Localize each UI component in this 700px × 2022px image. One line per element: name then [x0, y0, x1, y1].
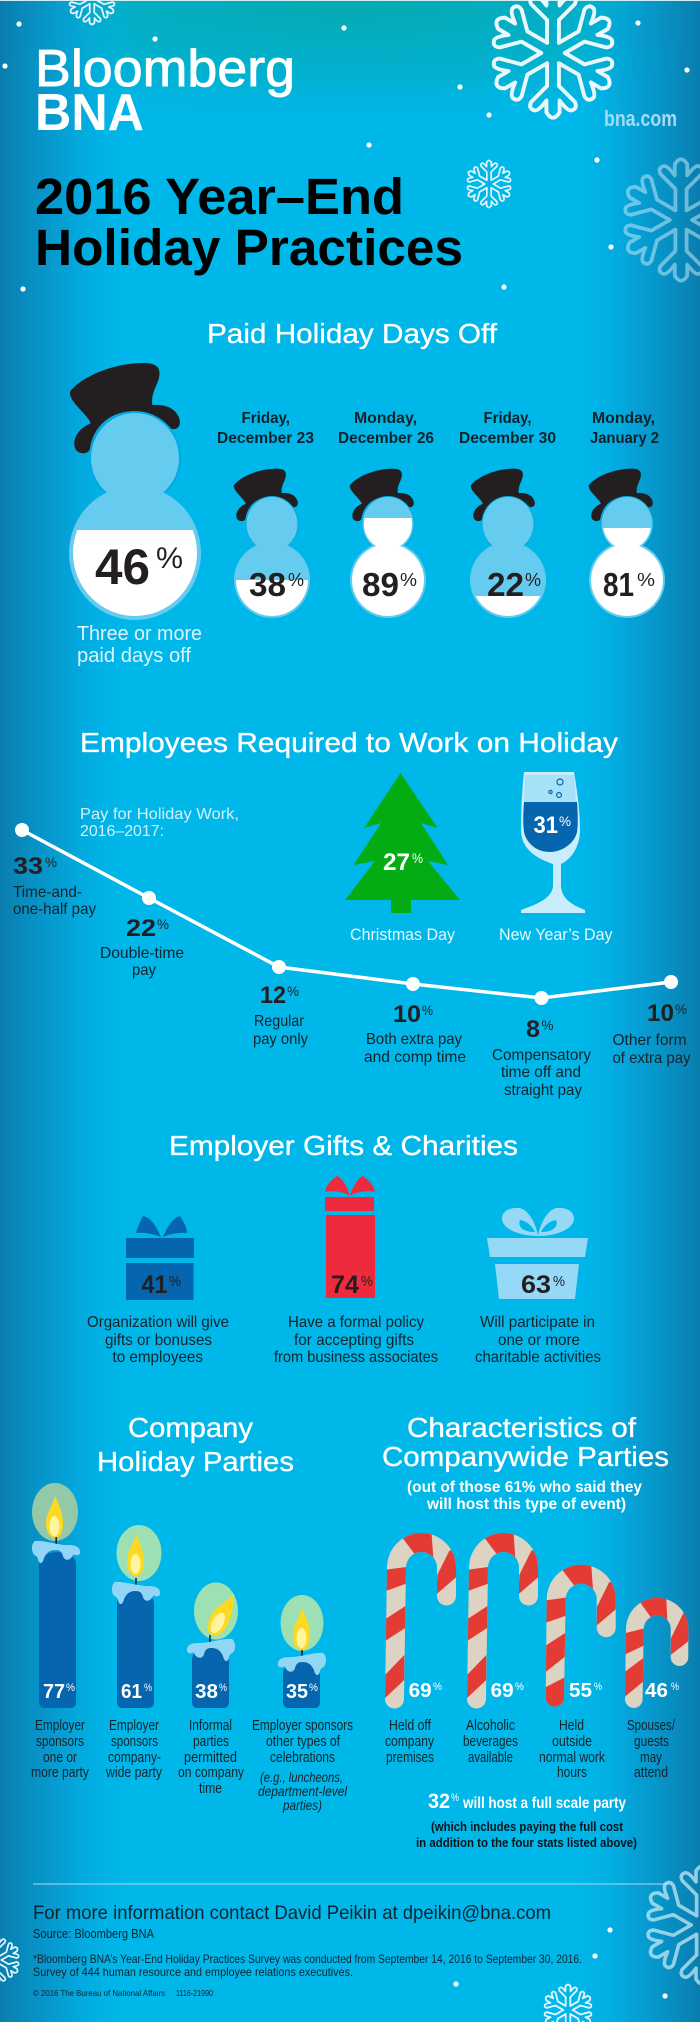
gift: 63% charitable activities: [475, 1208, 601, 1366]
date: January 2: Monday,: [592, 410, 655, 427]
data label: 8%: time off and: [501, 1064, 581, 1081]
heading: Holiday Parties: [97, 1446, 294, 1477]
data label: 10%: Both extra pay: [366, 1031, 462, 1048]
data label: 8%: %: [542, 1017, 554, 1033]
date: December 30: December 30: [459, 430, 556, 447]
data label: other 10%: 10: [647, 1000, 674, 1027]
candy cane: 69% alcoholic beverages: 69: [491, 1680, 514, 1702]
candle: 38% informal parties: parties: [193, 1734, 229, 1750]
candy cane: 46% spouses may attend: [625, 1598, 688, 1777]
date: December 30: %: [525, 570, 541, 590]
data label: 12%: Regular: [254, 1013, 305, 1030]
heading: [382, 1412, 669, 1472]
gift: 74% formal policy: Have a formal policy: [288, 1314, 424, 1331]
gift: 74% formal policy: from business associates: [274, 1349, 438, 1366]
subheading: (out of those 61% who said they: [407, 1479, 642, 1496]
data label: other 10%: %: [675, 1001, 687, 1017]
icon: champagne glass 31%: 31: [534, 812, 558, 839]
candle: 61% company-wide party: company-: [108, 1750, 161, 1766]
candle: 77% one or more party: 77: [43, 1681, 65, 1703]
candle: 61% company-wide party: [105, 1525, 163, 1781]
candy cane: 55% outside normal hours: Held: [559, 1718, 584, 1734]
icon: champagne glass 31%: New Year’s Day: [499, 925, 613, 944]
candle: 38% informal parties: time: [199, 1781, 222, 1797]
candle: 38% informal parties: [178, 1582, 245, 1797]
date: December 26: [338, 410, 434, 618]
panel: paid holiday days off: [69, 318, 665, 667]
data label: 12%: pay only: [253, 1031, 308, 1048]
candle: 38% informal parties: 38: [195, 1681, 218, 1703]
gift: 74% formal policy: [274, 1176, 438, 1366]
panel: characteristics of companywide parties: [375, 1412, 700, 1850]
data label: 33%: Time-and-: [13, 884, 82, 901]
caption: three or more: Three or more: [77, 623, 202, 645]
data label: 8%: [492, 1016, 591, 1099]
candle: 35% other celebrations: celebrations: [270, 1750, 335, 1766]
candy cane: 55% outside normal hours: outside: [552, 1734, 592, 1750]
main title: [35, 168, 463, 276]
candle: 61% company-wide party: sponsors: [111, 1734, 158, 1750]
footer: contact and source: © 2016 The Bureau of National Affairs: [33, 1988, 165, 1998]
subheading: [407, 1479, 642, 1513]
date: January 2: %: [637, 570, 655, 590]
candy cane: 55% outside normal hours: 55: [569, 1680, 592, 1702]
data label: 22%: pay: [132, 962, 156, 979]
data label: 22%: [100, 915, 184, 979]
date: December 23: [217, 410, 314, 618]
snowman: three or more days 46%: [69, 363, 201, 620]
gift: 74% formal policy: for accepting gifts: [294, 1332, 414, 1349]
gift: 41% give gifts: %: [169, 1273, 181, 1290]
candle: 77% one or more party: one or: [43, 1750, 77, 1766]
candy cane: 69% off premises: 69: [409, 1680, 432, 1702]
data label: other 10%: Other form: [612, 1032, 686, 1049]
gift: 63% charitable activities: Will participate in: [480, 1314, 595, 1331]
candle: 35% other celebrations: Employer sponsors: [252, 1718, 353, 1734]
candle: 61% company-wide party: 61: [121, 1681, 142, 1703]
date: December 26: December 26: [338, 430, 434, 447]
date: December 26: Monday,: [354, 410, 417, 427]
logo: Bloomberg BNA: [35, 40, 295, 142]
panel: company holiday parties: [31, 1412, 353, 1813]
snowman: three or more days 46%: 46: [95, 539, 150, 595]
date: December 23: December 23: [217, 430, 314, 447]
date: December 30: [459, 410, 556, 618]
footer: contact and source: Source: Bloomberg BNA: [33, 1927, 155, 1941]
callout: 32% full scale party: (which includes paying the full cost: [431, 1819, 624, 1834]
data label: 22%: 22: [126, 915, 156, 942]
callout: 32% full scale party: [416, 1790, 637, 1850]
candle: 35% other celebrations: 35: [286, 1681, 308, 1703]
data label: 10%: [364, 1001, 466, 1066]
data label: 33%: 33: [13, 853, 43, 880]
website link: bna.com: [604, 106, 677, 131]
data label: 22%: Double-time: [100, 945, 184, 962]
snowman: three or more days 46%: %: [156, 542, 183, 575]
callout: 32% full scale party: 32: [428, 1790, 450, 1813]
candy cane: 69% off premises: premises: [386, 1750, 434, 1766]
candle: 35% other celebrations: parties): [282, 1797, 322, 1813]
logo: Bloomberg BNA: BNA: [35, 84, 144, 142]
candle: 35% other celebrations: other types of: [266, 1734, 341, 1750]
line chart: pay types: [13, 823, 690, 1099]
caption: three or more: paid days off: [77, 645, 191, 667]
candle: 77% one or more party: sponsors: [36, 1734, 84, 1750]
candy cane: 46% spouses may attend: 46: [645, 1680, 668, 1702]
data label: 33%: one-half pay: [13, 901, 96, 918]
data label: 8%: straight pay: [504, 1082, 582, 1099]
gift: 74% formal policy: 74: [331, 1271, 359, 1299]
data label: 33%: %: [45, 854, 57, 870]
icon: christmas tree 27%: [345, 773, 460, 944]
heading: Employees Required to Work on Holiday: [80, 727, 618, 758]
candle: 35% other celebrations: department-level: [258, 1783, 348, 1799]
candle: 38% informal parties: permitted: [184, 1750, 237, 1766]
gift: 41% give gifts: Organization will give: [87, 1314, 229, 1331]
subheading: pay for holiday work: Pay for Holiday Work,: [80, 806, 239, 823]
logo: Bloomberg BNA: Bloomberg: [35, 40, 295, 98]
candy cane: 46% spouses may attend: attend: [634, 1765, 668, 1781]
candy cane: 69% off premises: %: [433, 1681, 442, 1693]
footer: contact and source: [33, 1902, 582, 1998]
data label: 12%: 12: [260, 982, 286, 1009]
candle: 61% company-wide party: wide party: [105, 1765, 163, 1781]
gift: 41% give gifts: 41: [142, 1271, 168, 1299]
gift: 41% give gifts: to employees: [112, 1349, 203, 1366]
data label: 33%: [13, 853, 96, 918]
candle: 35% other celebrations: [252, 1595, 353, 1813]
date: December 26: 89: [362, 566, 399, 603]
candy cane: 69% alcoholic beverages: %: [515, 1681, 524, 1693]
candy cane: 46% spouses may attend: %: [671, 1681, 679, 1693]
candy cane: 55% outside normal hours: %: [594, 1681, 602, 1693]
gift: 63% charitable activities: charitable activities: [475, 1349, 601, 1366]
candle: 77% one or more party: Employer: [35, 1718, 85, 1734]
data label: 8%: 8: [526, 1016, 540, 1043]
subheading: pay for holiday work: 2016–2017:: [80, 823, 164, 840]
gift: 74% formal policy: %: [361, 1273, 373, 1290]
data label: other 10%: of extra pay: [612, 1050, 690, 1067]
candle: 61% company-wide party: %: [144, 1682, 152, 1694]
main title: 2016 Year–End: [35, 168, 404, 225]
subheading: pay for holiday work: [80, 806, 239, 840]
candle: 61% company-wide party: Employer: [109, 1718, 159, 1734]
candy cane: 69% alcoholic beverages: beverages: [463, 1734, 518, 1750]
callout: 32% full scale party: %: [451, 1792, 459, 1804]
candy cane: 55% outside normal hours: normal work: [539, 1750, 606, 1766]
data label: 12%: [253, 982, 308, 1048]
date: January 2: 81: [603, 566, 634, 603]
candy cane: 46% spouses may attend: Spouses/: [627, 1718, 676, 1734]
candle: 77% one or more party: more party: [31, 1765, 90, 1781]
heading: Companywide Parties: [382, 1441, 669, 1472]
data label: 10%: and comp time: [364, 1049, 466, 1066]
gift: 63% charitable activities: 63: [521, 1271, 551, 1299]
candle: 38% informal parties: %: [219, 1682, 227, 1694]
callout: 32% full scale party: will host a full scale party: [462, 1795, 626, 1812]
main title: Holiday Practices: [35, 219, 463, 276]
candle: 38% informal parties: on company: [178, 1765, 245, 1781]
heading: [97, 1412, 294, 1477]
gift: 41% give gifts: [87, 1216, 229, 1366]
date: December 23: 38: [249, 566, 286, 603]
candy cane: 55% outside normal hours: [540, 1564, 616, 1777]
panel: employer gifts and charities: [87, 1130, 601, 1366]
data label: 10%: %: [422, 1002, 433, 1018]
candle: 35% other celebrations: %: [309, 1682, 318, 1694]
icon: christmas tree 27%: Christmas Day: [350, 925, 455, 944]
heading: Characteristics of: [407, 1412, 636, 1443]
heading: Employer Gifts & Charities: [169, 1130, 518, 1161]
icon: champagne glass 31%: [499, 772, 613, 944]
date: December 30: 22: [487, 566, 524, 603]
candy cane: 55% outside normal hours: hours: [557, 1765, 587, 1781]
candle: 38% informal parties: Informal: [189, 1718, 232, 1734]
panel: employees required to work on holiday: [13, 727, 690, 1099]
candy cane: 69% off premises: [385, 1533, 456, 1765]
footer: contact and source: 1116-21990: [176, 1988, 213, 1998]
date: January 2: [589, 410, 665, 618]
data label: other 10%: [612, 1000, 690, 1067]
footer: contact and source: For more information contact David Peikin at dpeikin@bna.com: [33, 1902, 551, 1924]
gift: 41% give gifts: gifts or bonuses: [105, 1332, 212, 1349]
subheading: will host this type of event): [426, 1496, 626, 1513]
data label: 8%: Compensatory: [492, 1047, 591, 1064]
data label: 22%: %: [157, 916, 169, 932]
candy cane: 69% alcoholic beverages: [464, 1533, 538, 1762]
date: December 30: Friday,: [484, 410, 532, 427]
candle: 77% one or more party: [31, 1483, 90, 1781]
footer: contact and source: *Bloomberg BNA’s Year-End Holiday Practices Survey was conducted from September 14, 2016 to September 30, 2016.: [33, 1952, 582, 1966]
data label: 12%: %: [287, 983, 299, 999]
icon: champagne glass 31%: %: [559, 813, 571, 829]
caption: three or more: [77, 623, 202, 667]
date: December 26: %: [400, 570, 417, 590]
callout: 32% full scale party: in addition to the four stats listed above): [416, 1835, 637, 1850]
date: December 23: %: [288, 570, 304, 590]
date: January 2: January 2: [590, 430, 659, 447]
candy cane: 69% off premises: company: [385, 1734, 435, 1750]
footer: contact and source: Survey of 444 human resource and employee relations executives.: [33, 1965, 353, 1979]
candy cane: 46% spouses may attend: may: [640, 1750, 663, 1766]
heading: Paid Holiday Days Off: [207, 318, 497, 349]
candy cane: 69% alcoholic beverages: available: [468, 1750, 513, 1766]
candy cane: 46% spouses may attend: guests: [634, 1734, 669, 1750]
icon: christmas tree 27%: %: [412, 850, 423, 866]
gift: 63% charitable activities: one or more: [498, 1332, 580, 1349]
candle: 35% other celebrations: (e.g., luncheons,: [260, 1769, 343, 1785]
heading: Company: [128, 1412, 253, 1443]
candle: 77% one or more party: %: [66, 1682, 75, 1694]
gift: 63% charitable activities: %: [553, 1273, 565, 1290]
candy cane: 69% off premises: Held off: [389, 1718, 432, 1734]
icon: christmas tree 27%: 27: [383, 849, 410, 876]
date: December 23: Friday,: [242, 410, 290, 427]
candy cane: 69% alcoholic beverages: Alcoholic: [466, 1718, 515, 1734]
data label: 10%: 10: [393, 1001, 421, 1028]
